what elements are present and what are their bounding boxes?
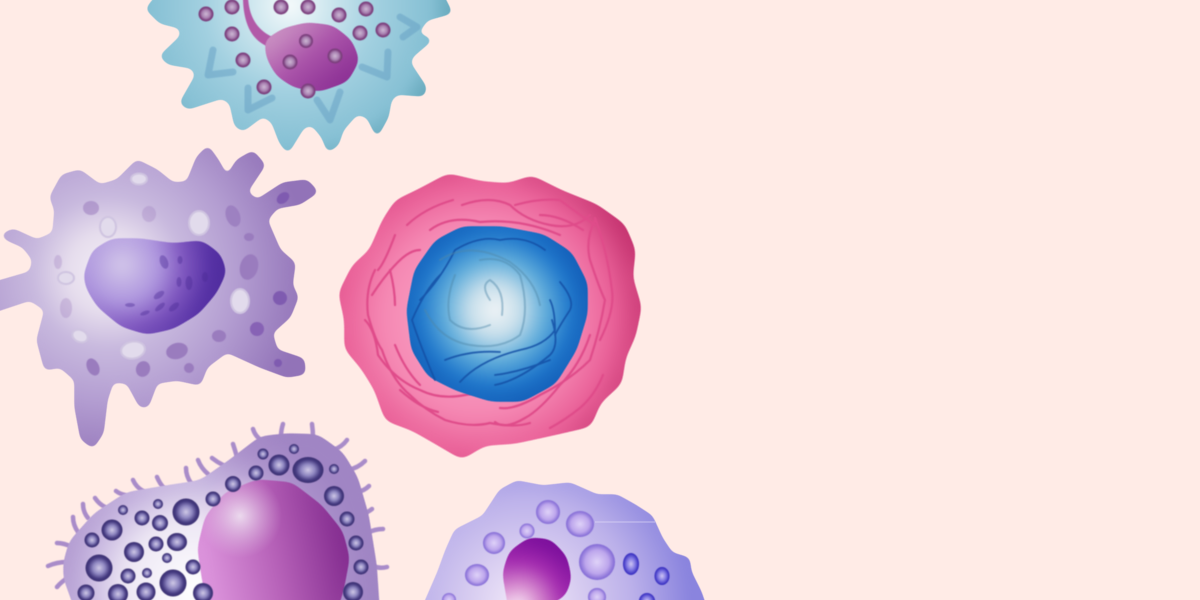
nucleus: teal cell <box>264 22 360 92</box>
cell body: periwinkle <box>415 481 712 600</box>
granules <box>198 0 390 98</box>
dark blue fibres <box>412 239 571 385</box>
nucleus: lilac cell <box>83 238 227 335</box>
cell: lilac macrophage <box>0 146 318 448</box>
cell body: pink <box>338 173 642 460</box>
pale nucleus fibres <box>425 250 540 346</box>
faint line <box>595 521 655 523</box>
surface hairs <box>48 424 387 587</box>
cell body: violet <box>63 433 381 600</box>
cell: pink cell with blue nucleus <box>338 173 642 460</box>
nucleus spots <box>125 254 208 317</box>
nucleus: blue <box>406 226 588 402</box>
cell: teal amoeboid cell <box>146 0 452 153</box>
vacuoles <box>58 174 249 360</box>
blue vesicles <box>623 553 670 600</box>
nucleus: violet cell <box>197 479 350 600</box>
cell: violet cell with dark vesicles <box>48 424 387 600</box>
purple organelles <box>54 190 292 379</box>
cell body: teal <box>146 0 452 153</box>
cell: periwinkle cell <box>415 481 712 600</box>
nucleus: magenta <box>502 537 572 600</box>
dark vesicles <box>78 444 368 600</box>
nucleus highlight <box>198 474 282 558</box>
nucleus tail <box>243 0 280 48</box>
pale vesicles <box>442 500 615 600</box>
pink fibres <box>365 200 612 428</box>
cell body: lilac <box>0 146 318 448</box>
chevrons inside teal cell <box>208 17 417 120</box>
